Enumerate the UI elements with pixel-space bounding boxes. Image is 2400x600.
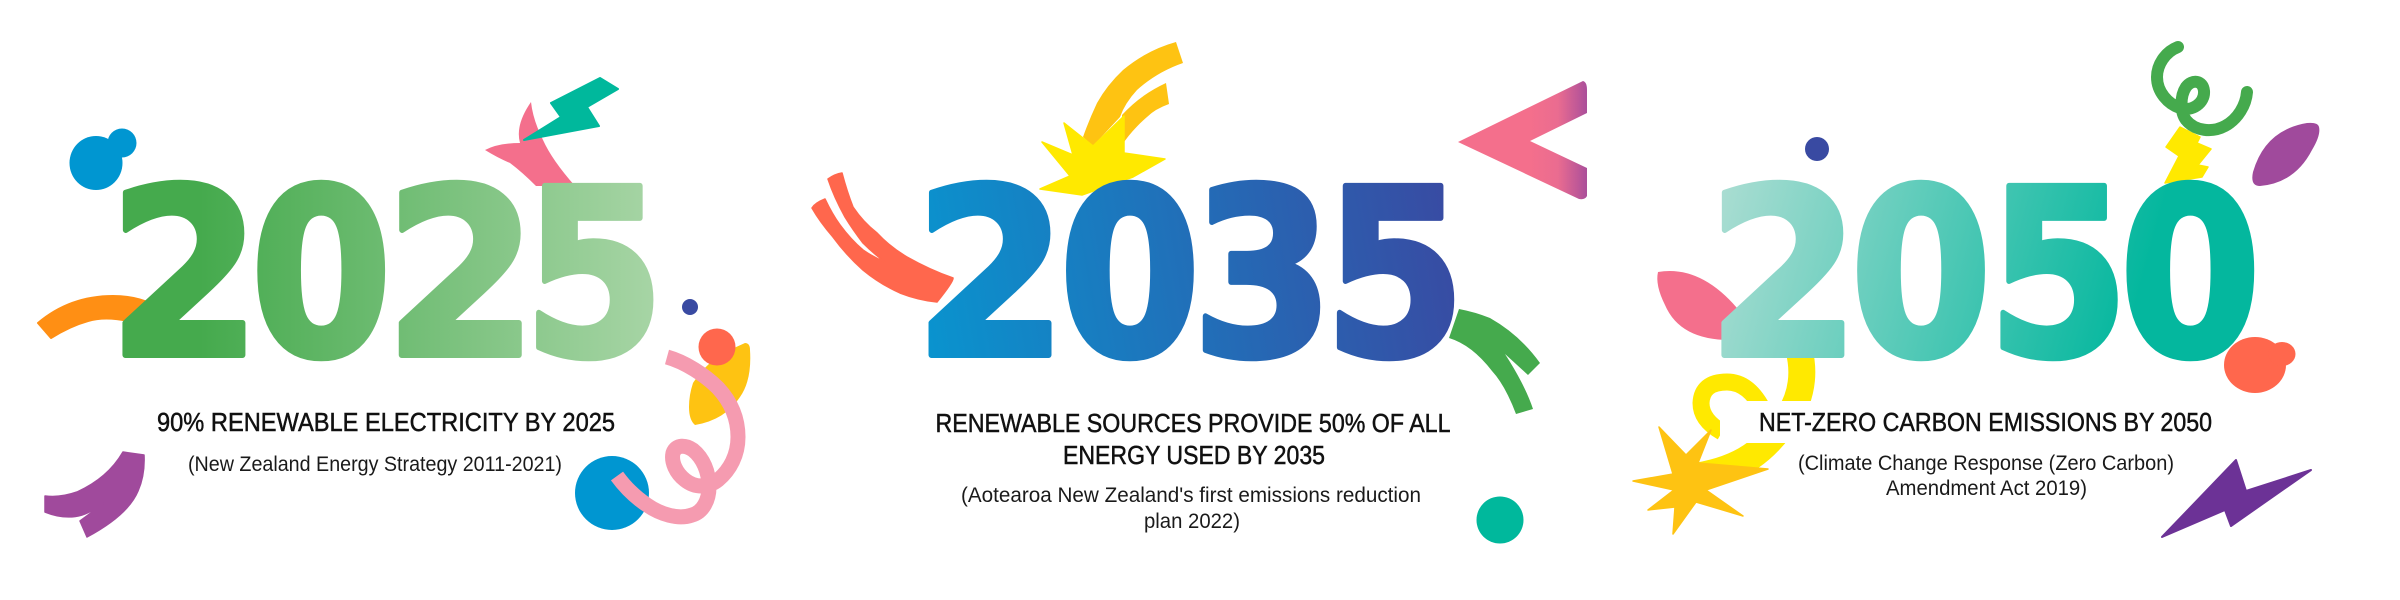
icon: gold star [1633,427,1768,534]
icon: blue blob [70,128,136,190]
source: 2025 goal: (New Zealand Energy Strategy 2011-2021) [188,452,562,476]
icon: teal circle [1476,496,1524,544]
icon: yellow ribbon [1698,350,1802,476]
icon: teal lightning bolt [524,78,618,140]
source: 2035 goal: (Aotearoa New Zealand's first emissions reduction [961,483,1421,507]
icon: green squiggle [2157,47,2247,130]
year number 2025 [108,139,665,410]
year number 2025: 2 [384,139,538,410]
year number 2025: 5 [523,139,665,410]
icon: navy dot [1805,137,1829,161]
heading: 2035 goal: RENEWABLE SOURCES PROVIDE 50% OF ALL [936,408,1450,438]
icon: pink squiggle [617,357,738,517]
panel: 2025 target [38,78,750,537]
icon: navy dot [682,299,698,315]
text background [1720,401,2220,443]
source: 2050 goal: Amendment Act 2019) [1886,476,2087,500]
icon: coral swoosh [812,173,953,302]
source: 2050 goal: (Climate Change Response (Zero Carbon) [1798,451,2174,475]
year number 2025: 0 [250,139,392,410]
icon: pink chevron [1458,81,1587,199]
icon: green swoosh [1449,309,1540,414]
year number 2025: 2 [108,139,262,410]
icon: coral blob [2224,337,2296,393]
heading: 2035 goal: ENERGY USED BY 2035 [1063,440,1325,470]
panel: 2035 target [812,42,1587,544]
icon: purple lightning bolt [2162,460,2311,537]
year number 2035: 2 [914,139,1068,410]
panel: 2050 target [1633,47,2319,537]
year number 2050: 0 [1850,139,1992,410]
year number 2050: 2 [1707,139,1861,410]
icon: purple leaf [2252,123,2319,186]
source: 2035 goal: plan 2022) [1144,509,1240,533]
icon: pink tail [485,102,575,186]
icon: gold shooting streak [1083,42,1183,146]
year number 2050 [1707,139,2261,410]
heading: 2025 goal: 90% RENEWABLE ELECTRICITY BY 2025 [157,407,615,437]
heading: 2050 goal: NET-ZERO CARBON EMISSIONS BY 2050 [1759,407,2212,437]
icon: pink leaf [1657,271,1737,340]
icon: coral circle [698,328,736,366]
source: 2050 goal [1798,451,2174,500]
icon: yellow star burst [1040,116,1165,195]
icon: purple swoosh [45,452,144,537]
icon: yellow bolt [2165,127,2211,183]
source: 2035 goal [961,483,1421,533]
icon: orange swoosh [38,296,152,338]
heading: 2035 goal [936,408,1450,470]
year number 2050: 0 [2119,139,2261,410]
year number 2035: 0 [1059,139,1201,410]
year number 2050: 5 [1987,139,2129,410]
icon: yellow petal [689,343,750,425]
year number 2035: 5 [1324,139,1466,410]
year number 2035: 3 [1192,139,1334,410]
year number 2035 [914,139,1466,410]
icon: blue circle [575,456,649,530]
